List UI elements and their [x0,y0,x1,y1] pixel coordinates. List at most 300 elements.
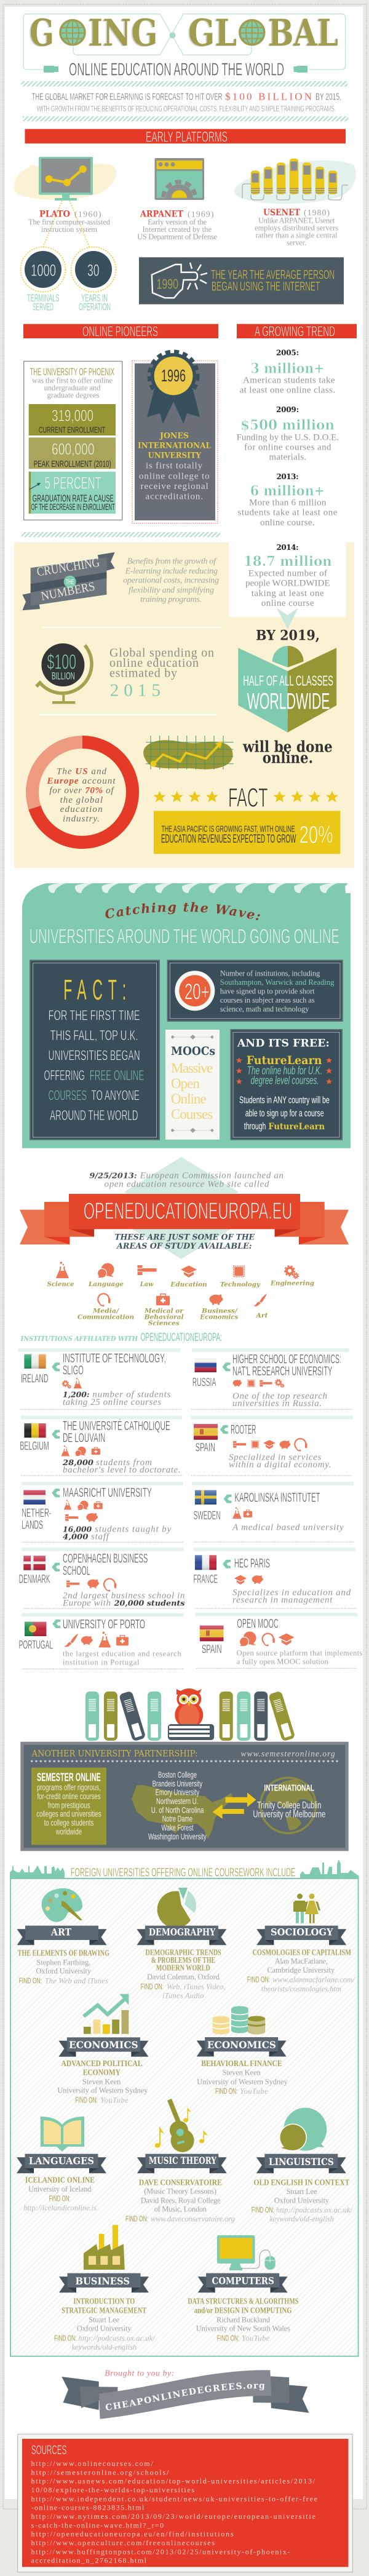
title: Going Global [30,12,338,55]
Semester Online description: colleges and universities [36,1809,101,1819]
Semester Online description: to college students [44,1818,93,1827]
course: Economics, political economy: ECONOMY [83,2067,121,2077]
Usenet caption [255,208,338,247]
flag: Portugal [25,1622,46,1636]
course: Computers [188,2235,298,2342]
Arpanet caption: Early version of the [148,218,207,226]
benefits text: flexibility and simplifying [129,586,214,595]
stat: graduation rate: GRADUATION RATE A CAUSE [33,494,114,504]
institution: Sweden [192,1482,355,1542]
stat: current enrollment [29,404,116,435]
icon: bar chart with arrow [84,1994,129,2034]
law: Law [140,1281,154,1288]
intro text: $100 BILLION [225,91,312,103]
institution: Denmark: DENMARK [19,1573,50,1586]
icon: people [293,1893,320,1923]
open education announcement: 9/25/2013: [89,1171,137,1180]
US universities list [148,1770,207,1841]
course: Business: STRATEGIC MANAGEMENT [62,2306,146,2315]
stat: graduation rate: 5 PERCENT [45,473,101,492]
icon: globe letter O [240,20,264,45]
Plato caption: (1960) [74,210,101,220]
course: Music Theory: FIND ON: [125,2214,148,2224]
script heading on arc [106,912,260,921]
stat: 30 years in operation [71,247,116,313]
US universities list: Emory University [156,1787,199,1797]
intro text [32,91,341,113]
institution: Denmark: 2nd largest business school in [63,1591,184,1600]
icon: globe letter O [60,20,85,45]
course: Languages: University of Iceland [28,2185,92,2193]
course: Economics, behavioral finance: ECONOMICS [207,2039,276,2051]
Arpanet caption: US Department of Defense [137,233,217,241]
institution: Portugal [19,1613,183,1669]
panel: Jones International University: receive regional [140,482,208,491]
Arpanet caption: ARPANET [140,210,184,220]
panel: Arpanet [137,158,217,241]
institution: Ireland: 1,200: [63,1390,89,1399]
flag: Denmark [23,1556,46,1570]
flag: Ireland [24,1354,46,1369]
donut chart: US and Europe share: The US and [57,766,107,776]
panel: fact UK universities: UNIVERSITIES BEGAN [48,1047,140,1063]
course: Demography [137,1888,226,2000]
institutions heading: OPENEDUCATIONEUROPA: [140,1331,222,1343]
Semester Online description: for-credit online courses [37,1791,101,1801]
panel: fact UK universities: AROUND THE WORLD [50,1107,138,1123]
panel: Catching the Wave [22,883,351,1148]
donut chart: US and Europe share [32,742,133,843]
institution: France [194,1548,356,1608]
panel: sources: http://semesteronline.org/schools/ [31,2468,169,2476]
panel: sources: http://www.usnews.com/education/top-world-universities/articles/2013/ [31,2477,315,2486]
institution: Open MOOC, Spain: Open source platform that implements [237,1649,362,1658]
course: Economics, behavioral finance: University of Western Sydney [197,2077,288,2086]
panel: sources: accreditation_n_2762168.html [31,2556,147,2565]
institution: Netherlands [21,1482,184,1542]
course: Demography: FIND ON: [141,1982,164,1991]
institution: Denmark: COPENHAGEN BUSINESS [63,1552,148,1566]
course: Computers: DATA STRUCTURES & ALGORITHMS [188,2297,298,2306]
icon: open book with person [238,646,336,733]
panel: Jones International University: accreditation. [145,492,203,502]
icon: computer and mouse [217,2235,276,2270]
institution: Russia [191,1348,352,1409]
institution: Denmark: Europe with [62,1598,111,1608]
title block [23,12,346,80]
panel: Jones International University: UNIVERSITY [148,451,202,460]
education [170,1266,207,1289]
global spending text: estimated by [109,667,177,680]
panel: sources: http://www.onlinecourses.com/ [31,2459,153,2468]
institution: Netherlands: 16,000 [63,1525,92,1534]
panel: University of Phoenix [24,361,122,520]
stat: 1000 terminals served: SERVED [33,302,54,313]
panel: FutureLearn free: The online hub for U.K. [247,1065,322,1077]
panel: FutureLearn free [231,1030,342,1140]
ribbon: tails [62,2370,309,2419]
title: Going Global: G [30,12,54,55]
Plato caption: The first computer-assisted [28,218,111,226]
panel: University of Phoenix: undergraduate and [44,384,101,392]
institution: Rooter, Spain: SPAIN [196,1441,215,1454]
ribbon: Crunching the Numbers: THE [66,578,74,586]
institution: France: research in management [232,1596,333,1605]
panel: University of Phoenix: THE UNIVERSITY OF PHOENIX [30,366,114,378]
course: Economics, behavioral finance: Steven Keen [223,2068,261,2077]
panel: University of Phoenix: was the first to offer online [32,376,113,385]
year 2009: for online courses and [244,443,331,453]
institution: Belgium: DE LOUVAIN [63,1431,105,1445]
institution: Denmark: SCHOOL [63,1564,90,1578]
benefits text: E-learning include reducing [125,566,218,576]
panel: fact UK universities: COURSES [48,1087,87,1103]
course: Demography: David Coleman, Oxford [147,1973,220,1981]
US universities list: Notre Dame [162,1814,192,1824]
course: Business: BUSINESS [75,2275,130,2287]
course: Demography: Web, iTunes Video, [167,1982,226,1991]
ribbon: Crunching the Numbers: CRUNCHING [36,555,101,579]
year 2005: American students take [243,375,335,385]
title shadow: G [28,12,53,55]
panel: University of Phoenix: graduate degrees [47,391,100,400]
year 2014 panel: 18.7 million [244,554,332,570]
icon: factory [84,2225,125,2270]
panel: FutureLearn free: through [244,1121,266,1132]
donut chart: US and Europe share: industry. [63,814,100,824]
business: Business/ [201,1307,238,1314]
fact: Asia Pacific growth: 20% [300,822,333,849]
section heading: Online Pioneers [23,324,218,340]
donut chart: US and Europe share: education [60,805,103,814]
course: Music Theory: www.daveconservatoire.org [151,2215,235,2224]
icon: coin stacks [213,2006,265,2035]
flag: France [195,1555,216,1570]
year 2005: 2005: [276,348,299,357]
institution: Belgium: bachelor's level to doctorate. [63,1465,181,1475]
divider [38,714,217,715]
icon: palette [42,1888,82,1922]
institution: Netherlands: staff [91,1532,110,1542]
course: Business: INTRODUCTION TO [73,2297,135,2306]
course: Languages: ICELANDIC ONLINE [25,2175,95,2184]
course: Languages: LANGUAGES [29,2155,94,2166]
course: Economics, political economy: ECONOMICS [69,2039,138,2051]
card: MOOCs: Courses [171,1107,213,1122]
icon: $100 billion globe: $100 [47,650,76,674]
flag: Sweden [195,1490,216,1505]
course: Computers: YouTube [242,2334,270,2342]
international partners [253,1783,325,1820]
course: Art: The Web and iTunes [45,1977,108,1986]
institution: Rooter, Spain: ROOTER [231,1423,256,1437]
art [253,1294,268,1319]
title shadow: BAL [267,12,337,55]
panel: Usenet [234,159,356,247]
US universities list: Boston College [158,1770,197,1779]
course: Economics, political economy: YouTube [100,2096,129,2105]
year 2005 [240,348,335,395]
institution: Sweden: A medical based university [232,1522,344,1532]
course: Business [54,2225,156,2351]
course: Music Theory: of Music, London [154,2205,207,2214]
course: Computers: FIND ON: [217,2333,239,2342]
flag: Spain [194,1424,218,1440]
icon: open book [41,2117,84,2152]
icon: Usenet servers [234,159,356,204]
course: Music Theory [125,2099,235,2224]
institution: France: Specializes in education and [232,1588,351,1597]
year 2013: 2013: [277,472,299,481]
institution: Open MOOC, Spain: SPAIN [202,1644,221,1656]
flag: Netherlands [23,1490,46,1505]
text: will be done online [242,738,333,767]
stat: 30 years in operation: 30 [87,261,100,280]
institution: Denmark [19,1548,184,1608]
language: Language [88,1281,124,1288]
Semester Online description: SEMESTER ONLINE [37,1771,101,1784]
international partners: University of Melbourne [253,1810,325,1820]
hatch divider [21,81,347,87]
icon: $100 billion globe [36,643,92,704]
institution: Rooter, Spain [191,1416,353,1476]
course: Business: http://podcasts.ox.ac.uk/ [78,2334,156,2342]
course: Sociology: Alan MacFarlane, [275,1957,328,1966]
global spending text: Global spending on [109,646,214,659]
course: Economics, political economy: FIND ON: [75,2096,98,2105]
skyline left [10,1866,65,1879]
wave panel background [22,883,351,1148]
title: Going Global: BAL [268,12,338,55]
course: Computers: COMPUTERS [212,2275,274,2286]
panel: 20+ institutions: Southampton, Warwick and Reading [220,978,335,987]
benefits text [123,557,219,605]
card: MOOCs: MOOCs [171,1044,215,1058]
law [138,1265,156,1288]
course: Art: FIND ON: [19,1976,42,1986]
intro text: THE GLOBAL MARKET FOR ELEARNING IS FORECAST TO HIT OVER [32,92,223,103]
panel: sources: 10/08/explore-the-worlds-top-universities [31,2486,194,2494]
institution: Sweden: SWEDEN [194,1509,221,1522]
course: Art: Oxford University [36,1967,92,1976]
institution: Denmark: 20,000 students [114,1598,184,1607]
course: Languages: http://icelandiconline.is [23,2203,97,2212]
institution: Russia: universities in Russia. [232,1399,322,1409]
panel: Crunching the Numbers [14,543,354,868]
ribbon text curve [106,2388,266,2411]
fact heading with stars: FACT [228,783,268,813]
benefits text: training programs. [140,595,202,605]
institution: Rooter, Spain: within a digital economy. [229,1460,331,1470]
year 2009: Funding by the U.S. D.O.E. [237,433,339,443]
stat: peak enrollment: 600,000 [52,441,95,458]
text: will be done online: online. [263,749,313,767]
title shadow: ING [87,12,156,55]
open education announcement [89,1171,284,1189]
icon: Arpanet window [155,158,204,200]
course: Music Theory: DAVE CONSERVATOIRE [139,2177,222,2187]
By 2019 heading: BY 2019, [256,628,320,644]
card: MOOCs [165,1030,220,1140]
cable knot [170,32,176,38]
course: Art: ART [50,1926,71,1938]
icon: speech bubbles [279,2108,327,2152]
year 2013: More than 6 million [249,498,327,508]
science [47,1262,74,1288]
institution: Ireland: IRELAND [21,1373,48,1386]
panel: sources: s-catch-the-online-wave.html?_r=0 [31,2521,164,2529]
panel: fact UK universities: OFFERING [44,1067,85,1083]
US universities list: Brandeis University [153,1778,202,1788]
course: Linguistics [252,2108,353,2224]
course: Economics, political economy [57,1994,148,2105]
Arpanet caption: (1969) [188,210,214,220]
Usenet caption: USENET [263,208,301,218]
institution: Ireland: INSTITUTE OF TECHNOLOGY, [63,1351,166,1366]
medical: Behavioral [144,1313,183,1321]
year 2013: 6 million+ [250,483,325,499]
heading: Catching the Wave: Catching the Wave: [105,902,260,920]
course: Computers: and/or DESIGN IN COMPUTING [194,2306,292,2315]
donut chart: US and Europe share: the global [60,795,103,805]
international partners: INTERNATIONAL [264,1783,314,1794]
card: MOOCs: Online [171,1091,207,1107]
callout: 1990: 1990 [156,276,178,292]
panel: sources: SOURCES [31,2443,66,2457]
panel: fact UK universities: FOR THE FIRST TIME [48,1007,140,1023]
benefits text: Benefits from the growth of [127,557,217,566]
panel: sources: http://www.huffingtonpost.com/2013/02/25/university-of-phoenix- [31,2547,290,2556]
science: Science [47,1281,74,1288]
course: Demography: DEMOGRAPHY [149,1926,216,1938]
institution: Ireland: SLIGO [63,1363,84,1377]
institution: Netherlands: students taught by [95,1525,172,1535]
map: globe [260,1778,315,1833]
USB plugs [44,66,308,73]
panel: Semester Online partnership: www.semesteronline.org [241,1749,335,1759]
course: Linguistics: Oxford University [274,2196,330,2204]
panel: fact UK universities: THIS FALL, TOP U.K. [50,1027,138,1043]
institution: France: FRANCE [194,1573,218,1586]
panel: sources [18,2434,352,2572]
stacked book [168,1724,214,1740]
panel: sources: http://openeducationeuropa.eu/en/find/institutions [31,2530,234,2538]
panel: 20+ institutions: courses in subject areas such as [220,996,315,1004]
media: Media/ [92,1307,119,1314]
Semester Online description: from prestigious [48,1800,90,1810]
card: MOOCs: Massive [171,1060,213,1076]
institutions heading: INSTITUTIONS AFFILIATED WITH [20,1335,138,1343]
course: Linguistics: keywords/old-english [269,2215,334,2224]
skyline right [300,1859,359,1879]
section heading: Early Platforms [25,129,346,146]
title: Going Global: ING [89,12,157,55]
ribbon: Crunching the Numbers [22,552,115,610]
institution: Belgium: 28,000 [62,1458,93,1467]
USB cable frame [23,14,346,70]
panel: 20+ institutions: have signed up to provide short [220,987,315,996]
course: Economics, political economy: ADVANCED POLITICAL [62,2059,143,2068]
wave crests [48,883,351,893]
course: Business: Oxford University [77,2324,132,2333]
US universities list: Northwestern U. [156,1796,198,1806]
course: Demography: DEMOGRAPHIC TRENDS [145,1947,221,1957]
icon: guitar and notes [155,2099,208,2152]
map: United States [132,1785,232,1839]
year 2013: students take at least one [237,508,338,518]
year 2005: 3 million+ [251,361,324,377]
credit: brought to you by [62,2368,309,2419]
institution: Portugal: PORTUGAL [19,1639,53,1652]
course: Business: Stuart Lee [89,2315,119,2324]
owl [175,1688,203,1728]
Usenet caption: rather than a single central [256,231,338,240]
panel: sources: http://www.openculture.com/freeonlinecourses [31,2538,215,2547]
course: Linguistics: Stuart Lee [287,2187,317,2196]
Plato caption [28,210,111,234]
flag: Russia [194,1358,216,1372]
panel: fact UK universities: FACT: [63,974,126,1006]
panel: FutureLearn free: degree level courses. [251,1074,319,1086]
arrow down [277,608,298,629]
course: Economics, political economy: Steven Keen [82,2077,121,2086]
institution: Netherlands: 4,000 [63,1532,89,1541]
medical: Sciences [148,1319,180,1327]
Usenet caption: Unlike ARPANET, Usenet [258,217,335,225]
course: Linguistics: FIND ON: [252,2205,274,2214]
medical: Medical or [144,1307,184,1314]
icon: growth chart [143,736,234,769]
panel: 20+ institutions: science, math and technology [220,1004,309,1013]
flag: Belgium [24,1423,46,1437]
course: Economics, behavioral finance: FIND ON: [215,2086,237,2096]
stat: 1000 terminals served: 1000 [31,261,56,280]
Plato caption: PLATO [39,210,70,220]
panel: fact UK universities: TO ANYONE [91,1087,140,1103]
ribbon text: cheaponlinedegrees.org: CHEAPONLINEDEGREES.org [106,2383,264,2410]
icon: award rosette: 1996 [161,366,186,385]
hatch divider [23,116,348,121]
intro text: BY 2015, [315,92,341,103]
panel: FutureLearn free: FutureLearn [247,1054,322,1067]
icon: Plato monitor [14,157,116,201]
panel: 20+ institutions [167,960,343,1021]
Usenet caption: server. [287,239,306,247]
year 2013 [237,472,338,528]
title shadow [28,12,337,55]
year 2014 panel [229,543,346,617]
course: Music Theory: (Music Theory Lessons) [144,2187,216,2196]
course: Sociology: FIND ON: [247,1975,270,1984]
course: Demography: MODERN WORLD [156,1963,210,1973]
engineering [270,1266,314,1287]
course: Sociology: www.alanmacfarlane.com/ [272,1976,355,1984]
icon: pointing hand [152,263,207,298]
institution: Netherlands: LANDS [22,1519,43,1532]
year 2009: materials. [269,453,306,463]
panel: sources: -online-courses-8823835.html [31,2503,145,2512]
international partners: Trinity College Dublin [257,1800,321,1811]
year 2009: 2009: [276,405,299,414]
institutions heading [20,1331,222,1343]
institution: Portugal: institution in Portugal [63,1658,140,1667]
open education announcement: European Commission launched an [140,1171,284,1181]
title shadow: GL [187,12,236,55]
stat: peak enrollment [29,437,116,469]
panel: Semester Online partnership [20,1742,349,1851]
US universities list: U. of North Carolina [151,1805,204,1815]
panel: Semester Online partnership: ANOTHER UNIVERSITY PARTNERSHIP: [31,1749,197,1759]
